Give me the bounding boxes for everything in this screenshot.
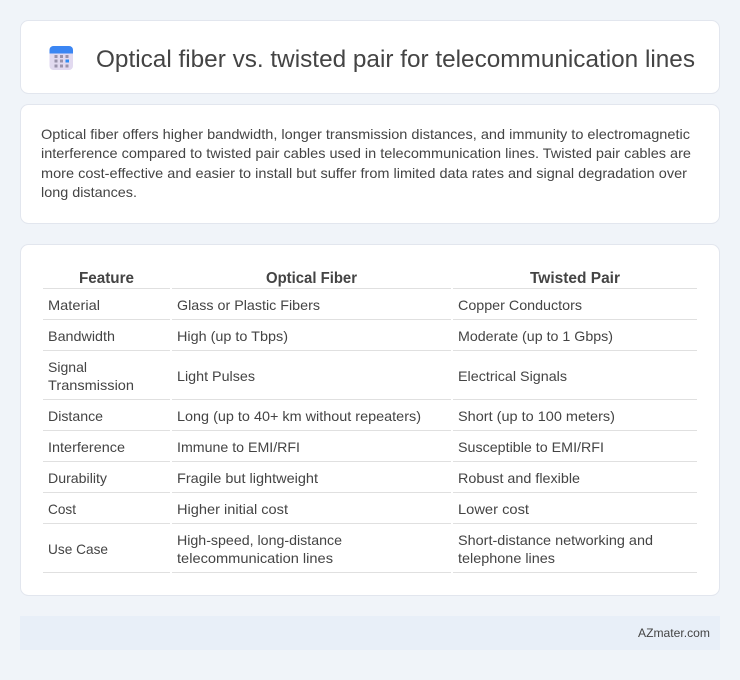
row: distance xyxy=(48,408,615,424)
table header: Optical Fiber xyxy=(266,270,357,287)
row: interference: Immune to EMI/RFI xyxy=(177,439,300,455)
row: distance: Distance xyxy=(48,408,103,424)
row: signal transmission: Light Pulses xyxy=(177,368,255,384)
icon: calendar xyxy=(50,46,73,70)
row: bandwidth: High (up to Tbps) xyxy=(177,328,288,344)
row: interference xyxy=(48,439,604,455)
row: use case: High-speed, long-distance xyxy=(177,532,342,548)
row: material: Glass or Plastic Fibers xyxy=(177,297,320,313)
row: use case: Short-distance networking and xyxy=(458,532,653,548)
row: use case: telecommunication lines xyxy=(177,550,333,566)
summary panel xyxy=(20,104,720,224)
row: bandwidth xyxy=(48,328,613,344)
row: signal transmission xyxy=(48,359,567,393)
row: distance: Short (up to 100 meters) xyxy=(458,408,615,424)
row: durability: Durability xyxy=(48,470,107,486)
footer credit: AZmater.com xyxy=(638,626,710,640)
summary text xyxy=(41,126,691,200)
row: distance: Long (up to 40+ km without repeaters) xyxy=(177,408,421,424)
row: use case: telephone lines xyxy=(458,550,555,566)
row: interference: Susceptible to EMI/RFI xyxy=(458,439,604,455)
footer bar xyxy=(20,616,720,650)
table header: Twisted Pair xyxy=(530,270,620,287)
row: material: Copper Conductors xyxy=(458,297,582,313)
summary text: more cost-effective and easier to install but suffer from limited data rates and signal degradation over xyxy=(41,165,687,181)
row: durability xyxy=(48,470,580,486)
row: cost: Cost xyxy=(48,501,76,517)
row: use case xyxy=(48,532,653,566)
row: signal transmission: Electrical Signals xyxy=(458,368,567,384)
row: cost: Higher initial cost xyxy=(177,501,288,517)
row: signal transmission: Signal xyxy=(48,359,87,375)
row: material xyxy=(48,297,582,313)
header panel xyxy=(20,20,720,94)
row: bandwidth: Bandwidth xyxy=(48,328,115,344)
title: Optical fiber vs. twisted pair for telecommunication lines xyxy=(96,46,695,73)
row: cost: Lower cost xyxy=(458,501,529,517)
row: cost xyxy=(48,501,529,517)
row: interference: Interference xyxy=(48,439,125,455)
row: durability: Robust and flexible xyxy=(458,470,580,486)
summary text: interference compared to twisted pair cables used in telecommunication lines. Twisted pair cables are xyxy=(41,145,691,161)
table header: Feature xyxy=(79,270,134,287)
row: signal transmission: Transmission xyxy=(48,377,134,393)
summary text: Optical fiber offers higher bandwidth, longer transmission distances, and immunity to electromagnetic xyxy=(41,126,690,142)
row: use case: Use Case xyxy=(48,541,108,557)
table header xyxy=(79,270,620,287)
comparison table panel xyxy=(20,244,720,596)
row: material: Material xyxy=(48,297,100,313)
row: durability: Fragile but lightweight xyxy=(177,470,318,486)
row: bandwidth: Moderate (up to 1 Gbps) xyxy=(458,328,613,344)
summary text: long distances. xyxy=(41,184,137,200)
